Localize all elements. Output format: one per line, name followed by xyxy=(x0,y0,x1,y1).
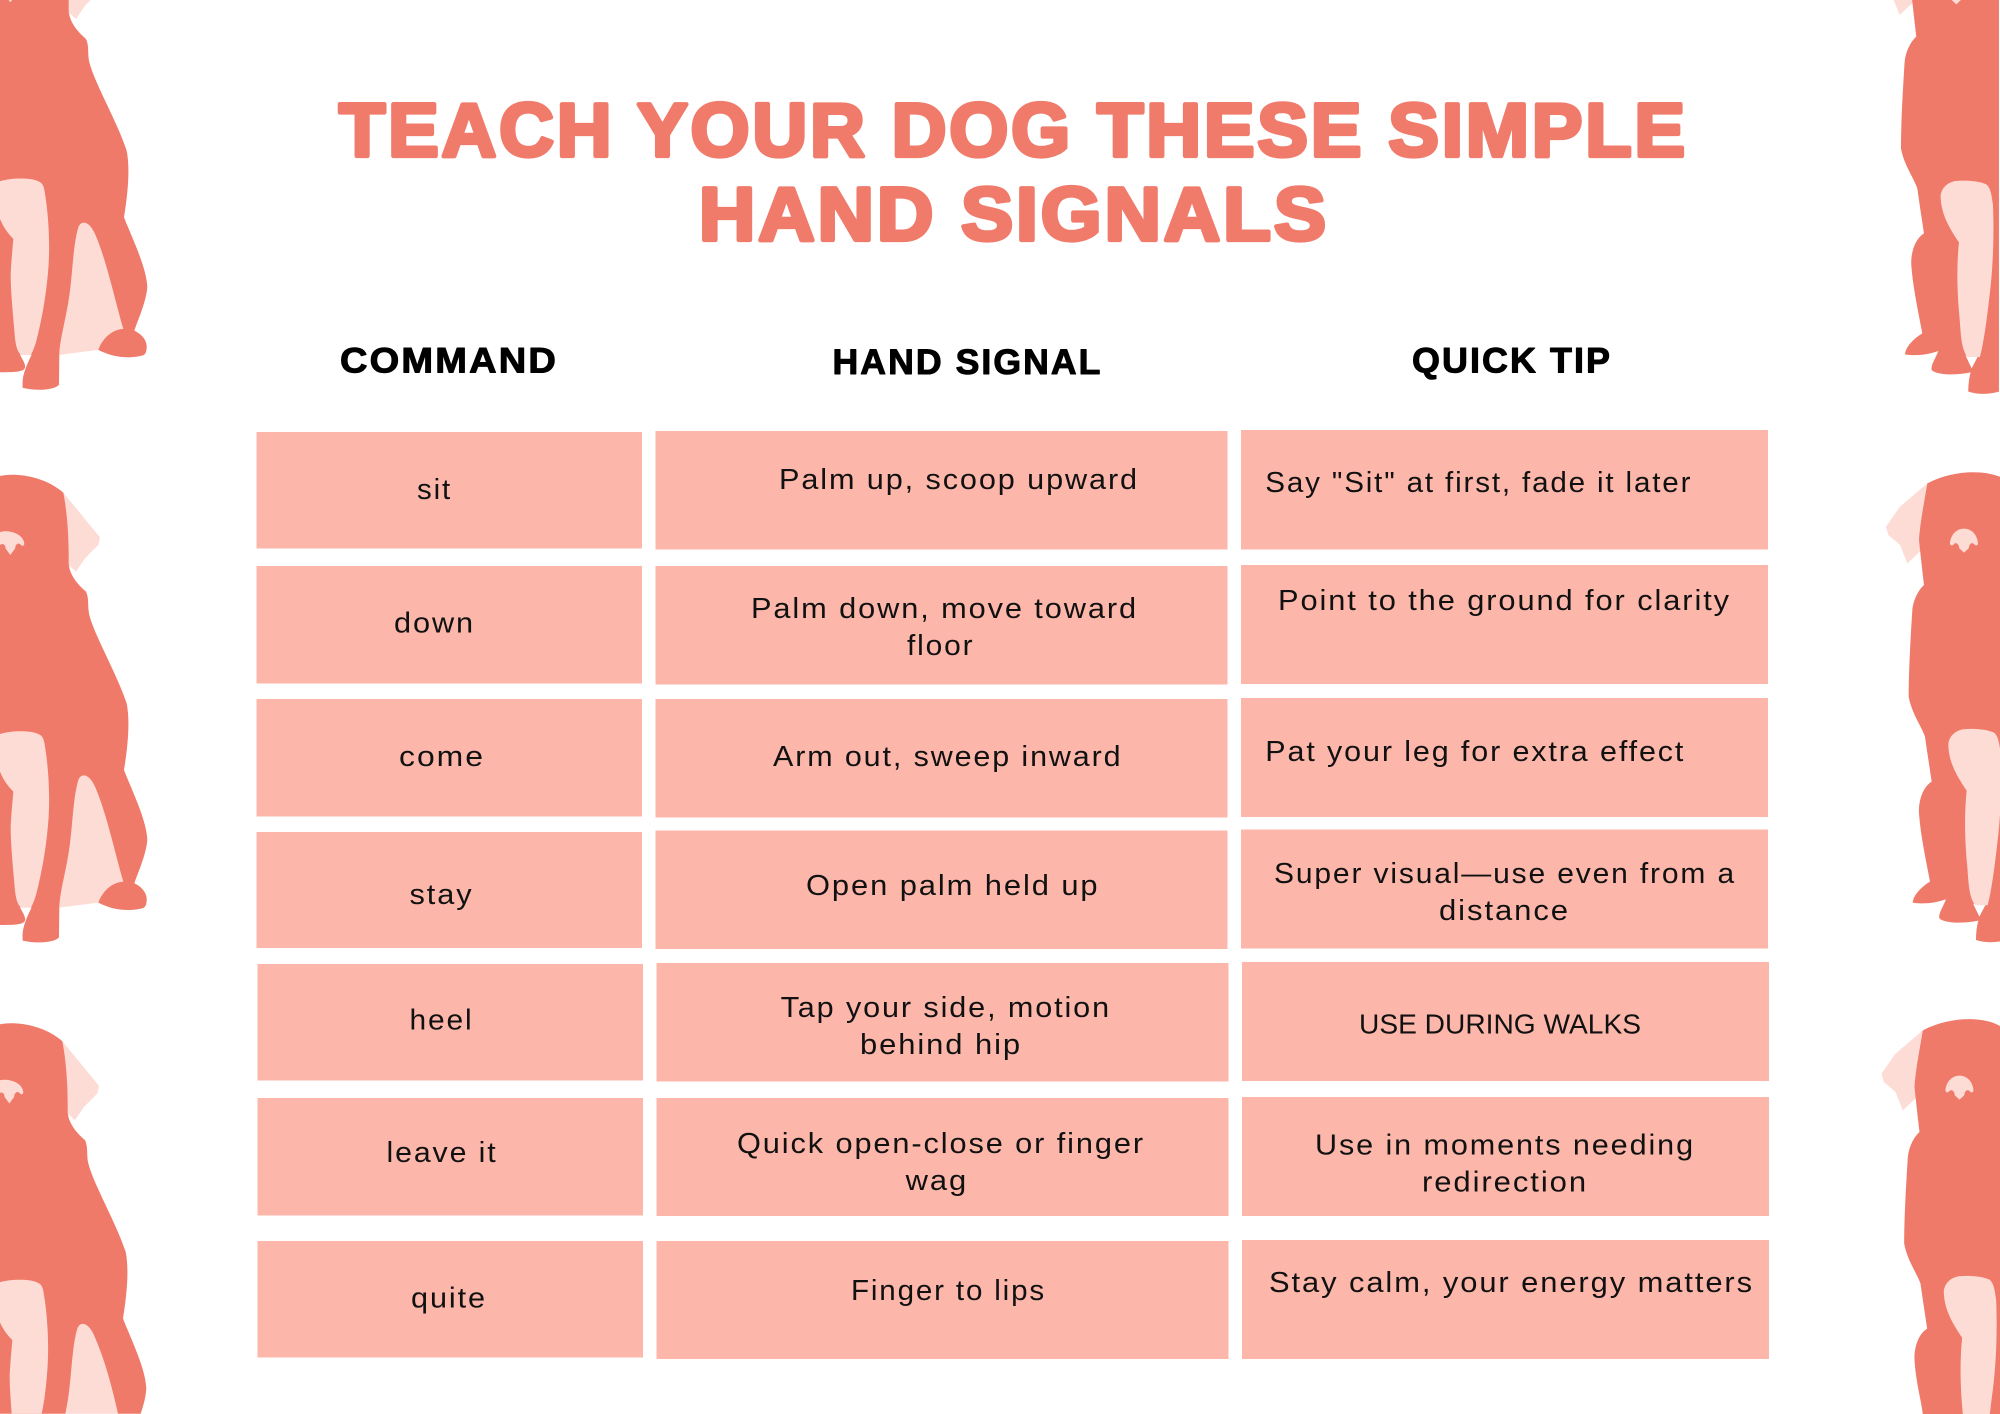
cell: point to the ground xyxy=(1241,565,1768,684)
cell: palm down: Palm down, move toward xyxy=(751,593,1138,625)
cell: super visual xyxy=(1241,830,1768,948)
cell: open palm xyxy=(656,830,1228,949)
cell: come xyxy=(256,699,642,816)
dog silhouette: right bottom xyxy=(1882,1019,2000,1414)
cell: pat your leg xyxy=(1241,698,1768,817)
column heading: command: COMMAND xyxy=(340,342,558,381)
cell: stay: stay xyxy=(410,879,474,911)
cell: quick open-close xyxy=(656,1098,1228,1216)
cell: leave it xyxy=(258,1098,643,1216)
cell: quick open-close: wag xyxy=(905,1165,968,1197)
cell: finger to lips xyxy=(656,1241,1228,1359)
cell: quick open-close: Quick open-close or finger xyxy=(737,1128,1145,1160)
cell: sit xyxy=(256,432,642,548)
cell: tap your side: behind hip xyxy=(860,1029,1022,1061)
title: HAND SIGNALS xyxy=(699,172,1329,256)
table: quick tip column xyxy=(1241,430,1769,1359)
dog silhouette: right top xyxy=(1894,0,1999,394)
cell: use in moments: Use in moments needing xyxy=(1315,1130,1695,1162)
cell: palm down: floor xyxy=(907,630,974,662)
cell: super visual: distance xyxy=(1439,895,1570,927)
dog silhouette: left top xyxy=(0,0,148,390)
dog silhouette: right middle xyxy=(1886,472,2000,942)
cell: palm up xyxy=(656,431,1228,550)
column heading: hand signal: HAND SIGNAL xyxy=(832,343,1102,382)
cell: use during walks: USE DURING WALKS xyxy=(1359,1008,1641,1040)
cell: finger to lips: Finger to lips xyxy=(851,1275,1046,1307)
cell: stay calm xyxy=(1242,1240,1769,1359)
cell: use in moments xyxy=(1242,1097,1769,1216)
cell: stay calm: Stay calm, your energy matters xyxy=(1269,1267,1754,1299)
title: TEACH YOUR DOG THESE SIMPLE xyxy=(339,88,1688,172)
cell: quite: quite xyxy=(411,1282,487,1314)
cell: heel: heel xyxy=(410,1004,474,1036)
cell: use during walks xyxy=(1242,962,1769,1081)
cell: tap your side: Tap your side, motion xyxy=(781,992,1111,1024)
table: command column xyxy=(256,432,643,1358)
title xyxy=(339,88,1688,256)
cell: say sit: Say "Sit" at first, fade it later xyxy=(1265,467,1692,499)
dog silhouette: left middle xyxy=(0,474,148,942)
cell: down: down xyxy=(394,608,475,640)
cell: palm down xyxy=(656,566,1228,684)
cell: super visual: Super visual—use even from a xyxy=(1274,858,1736,890)
cell: stay xyxy=(256,832,642,948)
cell: point to the ground: Point to the ground for clarity xyxy=(1278,585,1731,617)
cell: arm out: Arm out, sweep inward xyxy=(773,741,1122,773)
cell: quite xyxy=(258,1241,643,1358)
cell: say sit xyxy=(1241,430,1768,550)
cell: down xyxy=(256,566,642,684)
column heading: quick tip: QUICK TIP xyxy=(1412,342,1612,380)
cell: heel xyxy=(258,964,643,1080)
cell: leave it: leave it xyxy=(386,1137,498,1169)
cell: palm up: Palm up, scoop upward xyxy=(779,464,1139,496)
dog silhouette: left bottom xyxy=(0,1023,146,1414)
cell: come: come xyxy=(399,741,485,773)
cell: pat your leg: Pat your leg for extra effect xyxy=(1265,736,1685,768)
table: hand signal column xyxy=(656,431,1228,1359)
cell: tap your side xyxy=(656,963,1228,1082)
cell: use in moments: redirection xyxy=(1422,1166,1588,1198)
cell: sit: sit xyxy=(417,474,452,506)
cell: open palm: Open palm held up xyxy=(806,870,1100,902)
cell: arm out xyxy=(656,699,1228,818)
